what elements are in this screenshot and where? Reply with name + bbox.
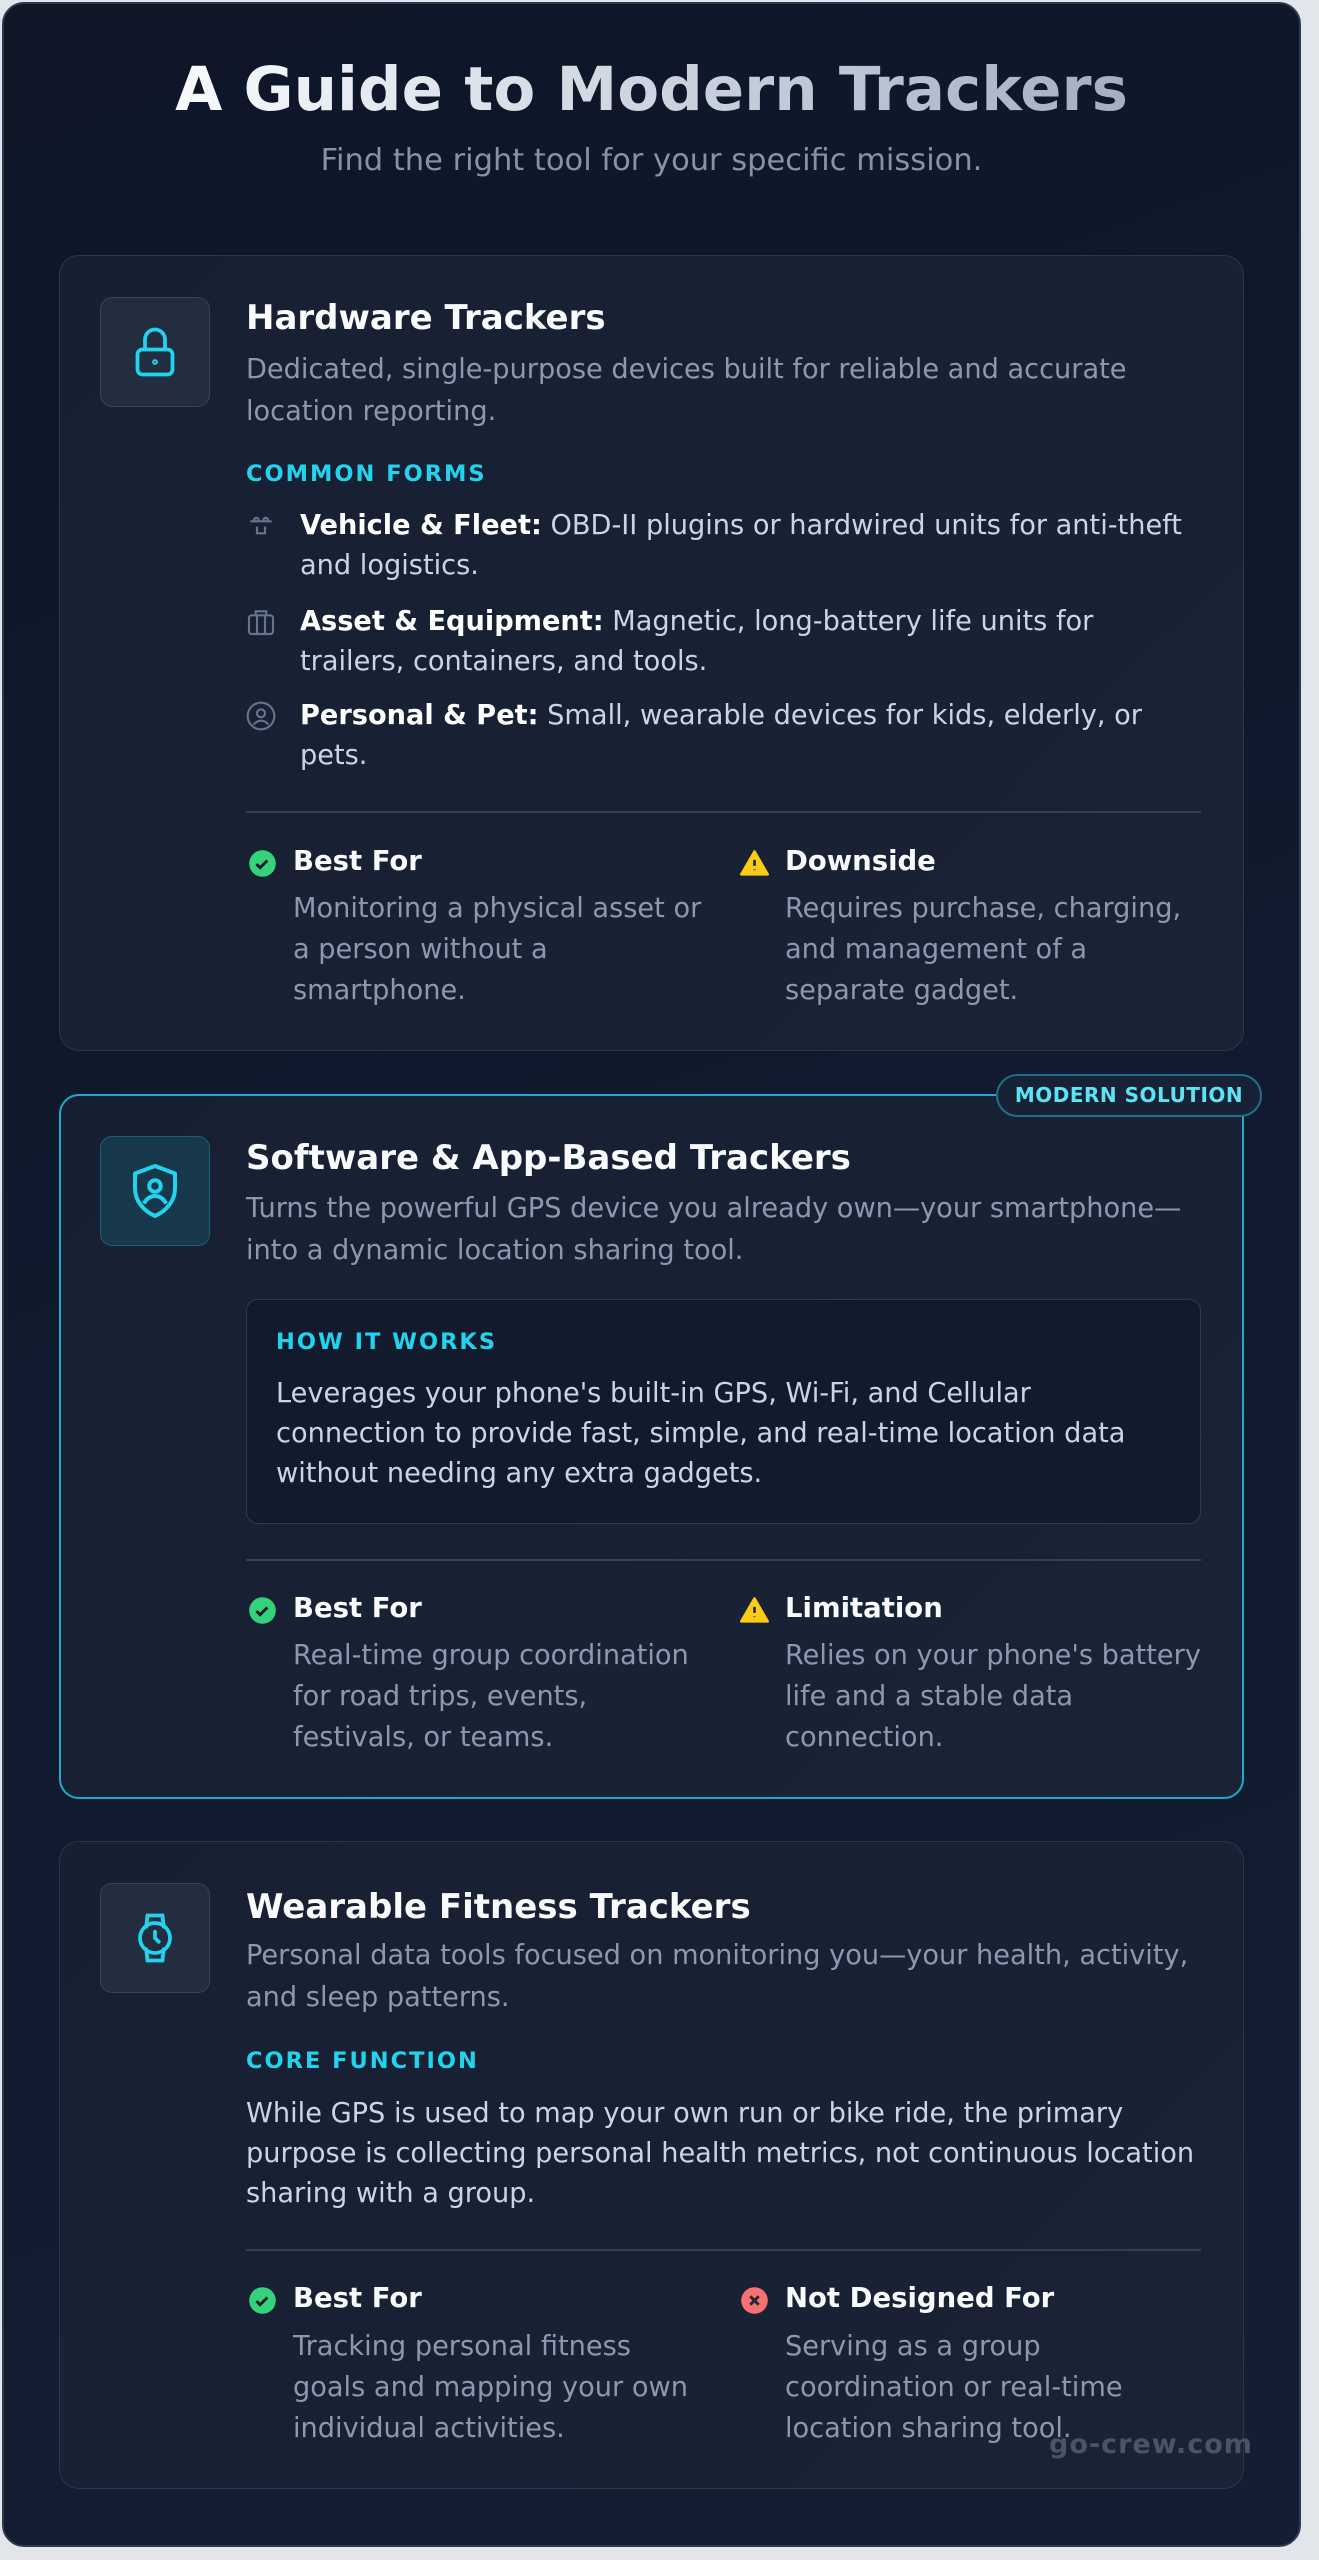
description bbox=[246, 1940, 1188, 2013]
not designed for: Serving as a group bbox=[785, 2331, 1041, 2362]
limitation bbox=[740, 1592, 1201, 1753]
not designed for: Not Designed For bbox=[785, 2282, 1054, 2314]
panel: wearable fitness trackers bbox=[59, 1841, 1244, 2489]
heading: Wearable Fitness Trackers bbox=[246, 1887, 751, 1927]
downside: and management of a bbox=[785, 934, 1087, 965]
best for: a person without a bbox=[293, 934, 548, 965]
icon: watch bbox=[100, 1883, 210, 1993]
best for: Real-time group coordination bbox=[293, 1640, 689, 1671]
best for: smartphone. bbox=[293, 975, 466, 1006]
limitation: connection. bbox=[785, 1722, 943, 1753]
how it works box: HOW IT WORKS bbox=[276, 1329, 497, 1355]
description: location reporting. bbox=[246, 396, 496, 427]
list item: asset: trailers, containers, and tools. bbox=[300, 646, 707, 677]
icon: shield bbox=[100, 1136, 210, 1246]
best for: festivals, or teams. bbox=[293, 1722, 553, 1753]
description bbox=[246, 354, 1126, 427]
downside: separate gadget. bbox=[785, 975, 1018, 1006]
best for bbox=[249, 1592, 689, 1753]
not designed for: coordination or real-time bbox=[785, 2372, 1123, 2403]
limitation: life and a stable data bbox=[785, 1681, 1073, 1712]
core function text: While GPS is used to map your own run or bike ride, the primary bbox=[246, 2098, 1123, 2129]
list item: vehicle: Vehicle & Fleet: OBD-II plugins or hardwired units for anti-theft bbox=[300, 510, 1182, 541]
best for: Tracking personal fitness bbox=[293, 2331, 631, 2362]
description: Turns the powerful GPS device you already own—your smartphone— bbox=[246, 1193, 1181, 1224]
description: Dedicated, single-purpose devices built for reliable and accurate bbox=[246, 354, 1126, 385]
list item: vehicle bbox=[250, 510, 1182, 581]
heading: Hardware Trackers bbox=[246, 298, 606, 338]
list item: asset bbox=[248, 606, 1094, 677]
core function text: sharing with a group. bbox=[246, 2178, 535, 2209]
core function text: purpose is collecting personal health metrics, not continuous location bbox=[246, 2138, 1194, 2169]
core function text bbox=[246, 2098, 1194, 2209]
description bbox=[246, 1193, 1181, 1266]
how it works box bbox=[246, 1299, 1201, 1524]
description: and sleep patterns. bbox=[246, 1982, 510, 2013]
how it works box: Leverages your phone's built-in GPS, Wi-Fi, and Cellular bbox=[276, 1378, 1031, 1409]
best for: goals and mapping your own bbox=[293, 2372, 688, 2403]
list item: asset: Asset & Equipment: Magnetic, long-battery life units for bbox=[300, 606, 1093, 637]
panel: software trackers bbox=[59, 1074, 1262, 1799]
panel: hardware trackers bbox=[59, 255, 1244, 1051]
label: core function: CORE FUNCTION bbox=[246, 2048, 479, 2074]
list item: vehicle: and logistics. bbox=[300, 550, 479, 581]
best for: for road trips, events, bbox=[293, 1681, 587, 1712]
list item: personal: pets. bbox=[300, 740, 367, 771]
icon: lock bbox=[100, 297, 210, 407]
list item: personal: Personal & Pet: Small, wearable devices for kids, elderly, or bbox=[300, 700, 1142, 731]
downside: Requires purchase, charging, bbox=[785, 893, 1181, 924]
badge: modern solution: MODERN SOLUTION bbox=[1015, 1083, 1243, 1107]
how it works box: connection to provide fast, simple, and real-time location data bbox=[276, 1418, 1125, 1449]
watermark: go-crew.com bbox=[1049, 2429, 1253, 2460]
limitation: Relies on your phone's battery bbox=[785, 1640, 1201, 1671]
best for: Best For bbox=[293, 1592, 422, 1624]
not designed for: location sharing tool. bbox=[785, 2413, 1072, 2444]
label: common forms: COMMON FORMS bbox=[246, 461, 487, 487]
limitation: Limitation bbox=[785, 1592, 943, 1624]
title: A Guide to Modern Trackers bbox=[175, 54, 1128, 125]
best for bbox=[249, 845, 702, 1006]
best for: Best For bbox=[293, 845, 422, 877]
best for: individual activities. bbox=[293, 2413, 565, 2444]
best for bbox=[249, 2282, 688, 2444]
list item: personal bbox=[246, 700, 1142, 771]
how it works box: without needing any extra gadgets. bbox=[276, 1458, 762, 1489]
best for: Monitoring a physical asset or bbox=[293, 893, 701, 924]
description: into a dynamic location sharing tool. bbox=[246, 1235, 743, 1266]
badge: modern solution bbox=[996, 1074, 1262, 1117]
downside: Downside bbox=[785, 845, 936, 877]
subtitle: Find the right tool for your specific mission. bbox=[321, 143, 982, 178]
not designed for bbox=[741, 2282, 1123, 2444]
description: Personal data tools focused on monitoring you—your health, activity, bbox=[246, 1940, 1188, 1971]
downside bbox=[740, 845, 1181, 1006]
heading: Software & App-Based Trackers bbox=[246, 1138, 851, 1178]
best for: Best For bbox=[293, 2282, 422, 2314]
